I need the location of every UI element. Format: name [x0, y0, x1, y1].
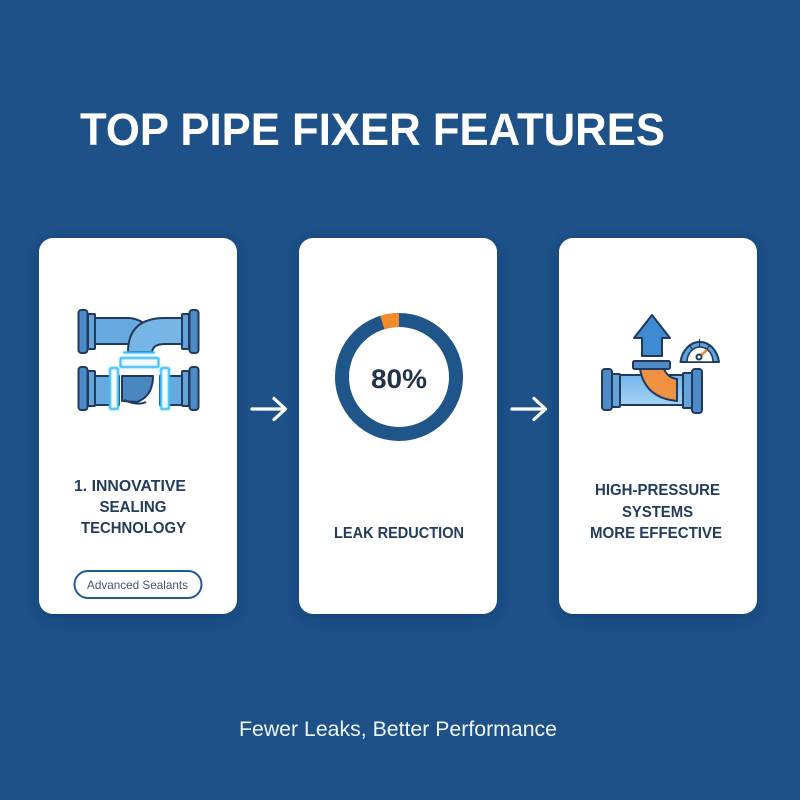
footer tagline: Fewer Leaks, Better Performance: [239, 718, 557, 741]
pill: advanced sealants: Advanced Sealants: [87, 578, 188, 592]
icon: pipe with pressure arrow and gauge: [602, 315, 719, 413]
card heading: 1. INNOVATIVE: [74, 478, 186, 495]
card heading: TECHNOLOGY: [81, 520, 187, 537]
card heading: SYSTEMS: [622, 504, 693, 521]
title: TOP PIPE FIXER FEATURES: [80, 104, 665, 155]
card heading: MORE EFFECTIVE: [590, 525, 722, 542]
donut chart: 80%: 80%: [371, 364, 427, 394]
panel: innovative sealing technology: [39, 238, 237, 614]
panel: leak reduction: [299, 238, 497, 614]
card label: LEAK REDUCTION: [334, 525, 464, 542]
card heading: [590, 482, 722, 542]
card heading: HIGH-PRESSURE: [595, 482, 720, 499]
donut chart: 80%: [342, 320, 456, 434]
pill: advanced sealants: [74, 571, 202, 598]
icon: interlocking pipes with seal: [78, 310, 198, 410]
icon: cyan seal clamps: [110, 352, 169, 409]
panel: high-pressure systems: [559, 238, 757, 614]
card heading: SEALING: [100, 499, 166, 516]
card heading: [74, 478, 187, 537]
arrow: [252, 398, 286, 420]
arrow: [512, 398, 546, 420]
